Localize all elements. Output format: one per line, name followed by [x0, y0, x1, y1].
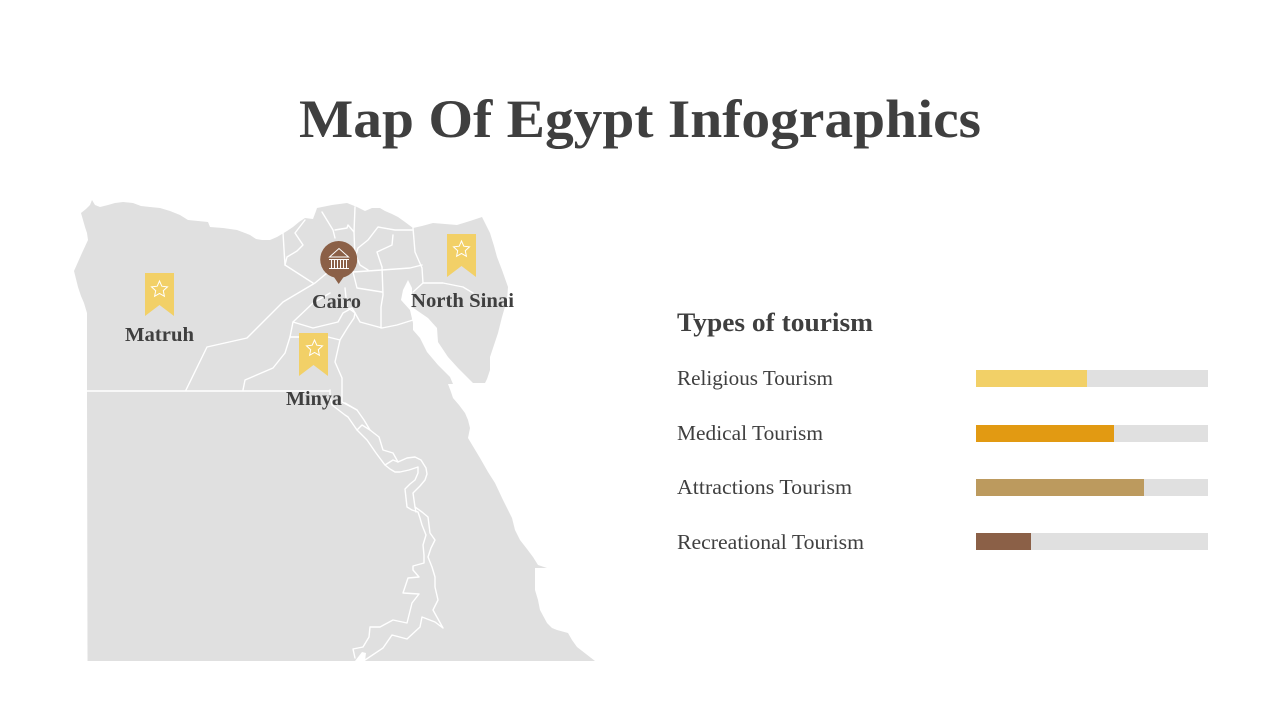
icon: bookmark star — [145, 273, 174, 316]
row: Attractions Tourism — [677, 475, 1208, 499]
icon: bookmark star — [299, 333, 328, 376]
title: Map Of Egypt Infographics — [299, 89, 981, 149]
row: Religious Tourism — [677, 366, 1208, 390]
row: Attractions Tourism: Attractions Tourism — [677, 475, 852, 499]
label: Cairo: Cairo — [312, 291, 361, 313]
map landmass — [74, 200, 595, 661]
marker: Matruh — [125, 273, 194, 346]
icon: museum pin — [320, 241, 357, 284]
label: Minya: Minya — [286, 388, 342, 410]
icon: bookmark star — [447, 234, 476, 277]
map of Egypt — [74, 200, 595, 661]
label: North Sinai: North Sinai — [411, 290, 514, 312]
row: Recreational Tourism: Recreational Tourism — [677, 530, 864, 554]
marker: North Sinai — [411, 234, 514, 312]
marker: Minya — [286, 333, 342, 410]
label: Matruh: Matruh — [125, 324, 194, 346]
row: Medical Tourism — [677, 421, 1208, 445]
marker: Cairo — [312, 241, 361, 313]
heading: Types of tourism — [677, 308, 873, 337]
row: Medical Tourism: Medical Tourism — [677, 421, 823, 445]
row: Religious Tourism: Religious Tourism — [677, 366, 833, 390]
province borders — [87, 207, 473, 660]
row: Recreational Tourism — [677, 530, 1208, 554]
panel: types of tourism — [677, 308, 1208, 554]
